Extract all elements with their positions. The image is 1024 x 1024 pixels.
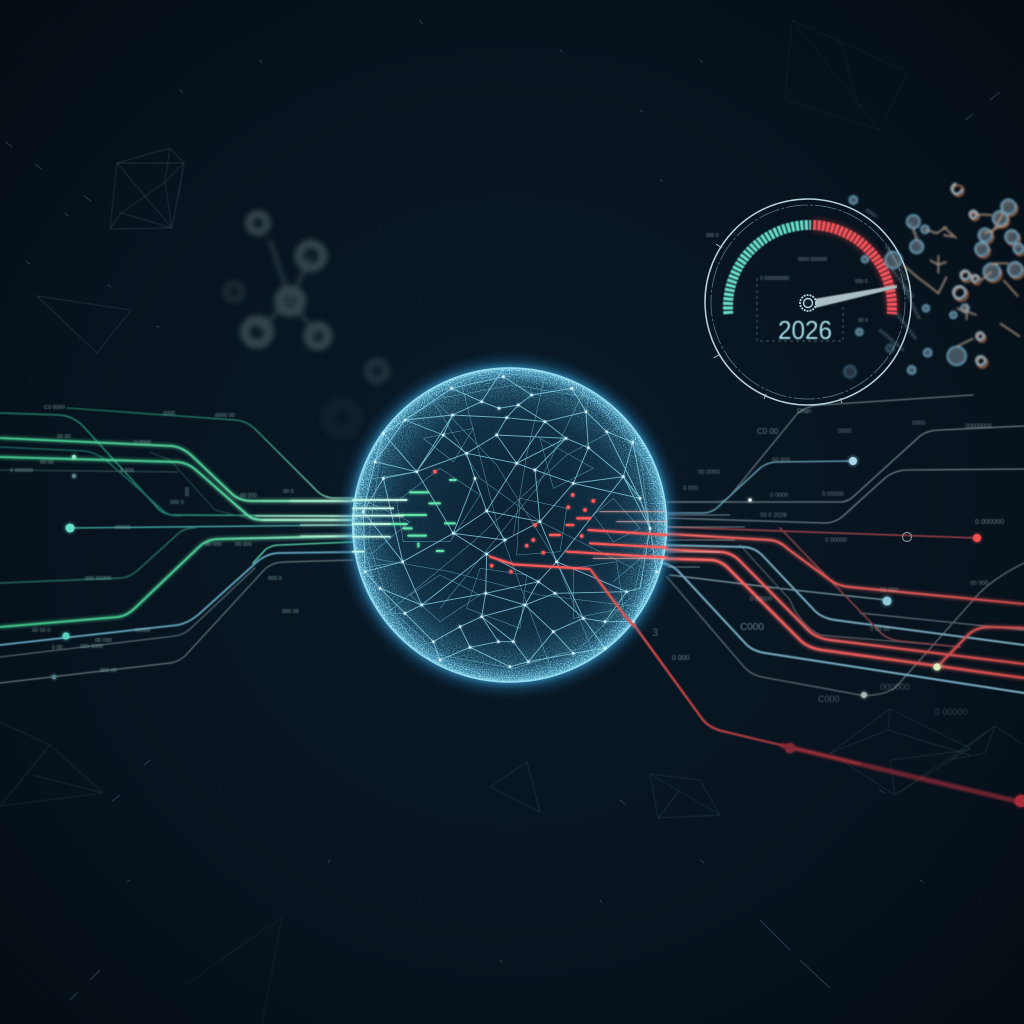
right stream tiny labels: 0 000000 [975, 519, 1004, 526]
long red diagonal line [605, 585, 860, 764]
right stream tiny labels [652, 421, 1004, 717]
grey lines [0, 568, 255, 657]
blue thick lines [660, 545, 1024, 645]
gauge small labels: 000 0 [855, 279, 868, 285]
left stream tiny labels: 00 000 [205, 542, 222, 548]
dim lower green branch [0, 528, 195, 583]
red dim to dot [640, 526, 977, 538]
left stream tiny labels: 0 000 [120, 468, 134, 474]
left stream tiny labels: 000 00 [100, 668, 117, 674]
right stream tiny labels: C000 [740, 622, 764, 633]
teal terminal line [70, 525, 353, 528]
left stream tiny labels: 0 000000 [10, 468, 33, 474]
grey blue to dot [670, 575, 887, 600]
right terminal dots [748, 457, 1024, 807]
wireframe: small centre bottom [490, 762, 720, 818]
molecule: atoms and bonds [844, 196, 1023, 378]
gauge year: 2026 [778, 315, 832, 345]
right stream tiny labels: 00000000 [965, 424, 992, 430]
bright red lines [580, 530, 1024, 678]
left stream tiny labels: C0 0000 [44, 405, 65, 411]
blurred background molecule [226, 214, 386, 432]
wireframe: lower left [0, 722, 103, 806]
molecule: open rings [952, 184, 985, 365]
right data streams [580, 395, 1024, 764]
sphere mesh lines [353, 365, 667, 678]
left stream tiny labels: 0000 00 [215, 413, 235, 419]
wireframe: bottom left [185, 917, 282, 1024]
left stream tiny labels: 00 0 [283, 489, 294, 495]
left stream tiny labels: 000 0 [170, 500, 184, 506]
left stream tiny labels: 000 [183, 487, 189, 496]
left stream tiny labels: 00 000 [240, 493, 257, 499]
right stream tiny labels: 0 000 [672, 655, 690, 662]
right stream tiny labels: 3 [652, 627, 658, 639]
wireframe: top right [785, 20, 908, 130]
right stream convergence highlights [667, 515, 745, 567]
gauge small labels: Dhan [797, 409, 811, 415]
left stream tiny labels: 00000 [115, 525, 130, 531]
left stream tiny labels: 00 000 [95, 638, 112, 644]
left stream convergence highlights [255, 501, 353, 536]
central network sphere [334, 349, 686, 701]
sphere mesh nodes [363, 377, 657, 667]
gauge red glow [813, 225, 892, 314]
right stream tiny labels: 0000 [912, 421, 926, 427]
left stream tiny labels: 0 00 [52, 645, 63, 651]
right stream tiny labels: 00 000 [880, 588, 899, 594]
blue line [0, 552, 353, 645]
molecule: dense edge near dial [867, 210, 923, 350]
right stream tiny labels: 0000 [838, 429, 852, 435]
wireframe: left triangle [37, 296, 131, 353]
sphere rim stroke [353, 368, 667, 682]
right stream tiny labels: 000000 [880, 682, 910, 692]
left data streams: green lines [0, 408, 353, 683]
left stream tiny labels: 000 00000 [85, 576, 111, 582]
gauge small labels: 0000 000000 [798, 257, 827, 263]
sphere: green data traces [353, 480, 456, 552]
sphere: red data traces [435, 472, 667, 627]
gauge small labels [706, 233, 868, 415]
sphere speckle texture [353, 368, 667, 682]
sphere mesh in zoom coordinates [353, 365, 667, 682]
wireframe: upper left [110, 148, 184, 229]
right stream tiny labels: C000 [818, 694, 840, 704]
right stream tiny labels: C0 00 [757, 427, 779, 436]
left stream tiny labels: 00 000 [235, 542, 252, 548]
blue terminal line [667, 461, 853, 513]
right stream tiny labels: 0 000 [683, 486, 699, 492]
left stream tiny labels [10, 405, 299, 674]
left stream tiny labels: 0000 [163, 411, 175, 417]
right stream ring marker [902, 532, 912, 542]
right stream tiny labels: 00 0000 [698, 470, 720, 476]
right stream tiny labels: 0 00 00 [870, 627, 891, 633]
sphere body [352, 367, 667, 683]
left stream tiny labels: 000 0 [268, 576, 282, 582]
left stream tiny labels: 00 00 0 [32, 628, 50, 634]
molecule: warm fringe [953, 185, 1024, 368]
grey upper lines [667, 395, 973, 502]
gauge red segments [813, 225, 892, 314]
left stream tiny labels: 00 00 [57, 434, 71, 440]
gauge hub [800, 295, 816, 311]
molecule: bonds [903, 213, 1020, 347]
left terminal dots [52, 455, 76, 679]
gauge readout bracket [757, 278, 843, 341]
right molecule cluster [844, 184, 1024, 378]
right stream tiny labels: 00 000 [772, 458, 791, 464]
right stream tiny labels: 0 00000 [825, 538, 847, 544]
gauge teal segments [728, 225, 811, 314]
gauge [705, 199, 911, 415]
right stream tiny labels: 0 00000 [935, 707, 968, 717]
gauge small labels: 0 000000000 [760, 276, 789, 282]
sphere halo [334, 349, 686, 701]
wireframe: lower right cluster [830, 709, 1024, 795]
right stream tiny labels: 00 000 [970, 581, 989, 587]
left stream tiny labels: 00 00 [40, 460, 54, 466]
gauge dial rings [705, 199, 911, 405]
left stream tiny labels: 000 00 [282, 609, 299, 615]
gauge small labels: 000 0 [706, 233, 719, 239]
long red line blurred far end [780, 745, 1024, 803]
gauge needle [813, 285, 897, 308]
right stream tiny labels: 0 00000 [822, 492, 844, 498]
right stream tiny labels: 0 0000 [770, 493, 789, 499]
right stream tiny labels: 00 0 2026 [760, 513, 787, 519]
bright green lines [0, 438, 353, 627]
right stream tiny labels: 0 00000 [750, 597, 772, 603]
left stream tiny labels: 0 0000 [134, 440, 151, 446]
gauge small labels: 00 0 [858, 318, 868, 324]
left stream tiny labels: 000 0000 [80, 644, 103, 650]
dim upper stream [67, 408, 353, 498]
left stream tiny labels: 00000 [135, 628, 150, 634]
